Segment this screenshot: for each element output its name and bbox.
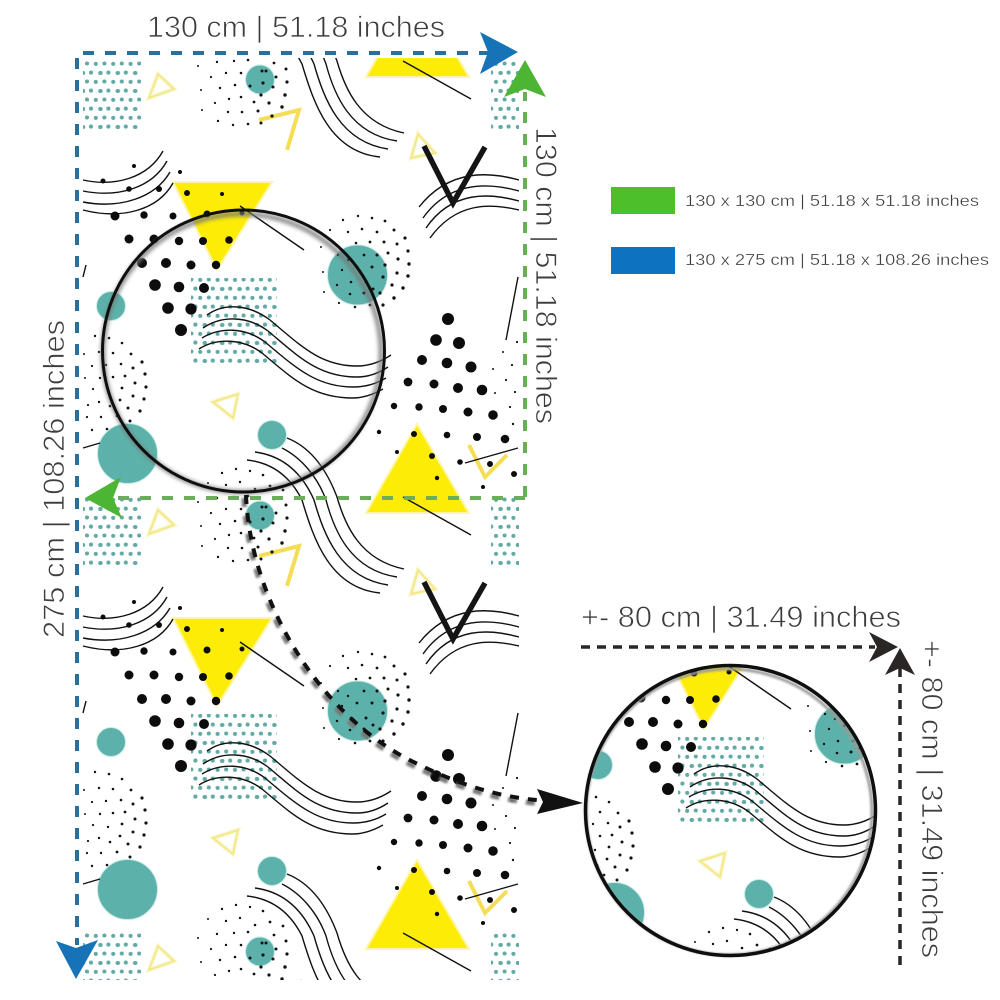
arrow: blue down <box>56 940 98 979</box>
label: right height: 130 cm | 51.18 inches <box>529 127 562 424</box>
arrow: connector head <box>537 789 583 814</box>
legend: green swatch <box>611 187 675 214</box>
curved dashed connector <box>244 495 537 803</box>
arrow: sample height <box>885 648 915 675</box>
arrow: sample width <box>869 632 898 662</box>
arrow: green left <box>85 477 122 518</box>
legend: green label: 130 x 130 cm | 51.18 x 51.18 inches <box>685 193 979 210</box>
panel: wallpaper pattern strip <box>80 58 519 980</box>
label: sample height: +- 80 cm | 31.49 inches <box>915 640 948 958</box>
label: top width: 130 cm | 51.18 inches <box>147 11 445 44</box>
arrow: blue right <box>480 32 518 74</box>
label: left height: 275 cm | 108.26 inches <box>38 320 71 638</box>
dashed outline: right side (green) <box>523 92 527 497</box>
sample height dashed line <box>898 668 902 965</box>
dashed outline: width (blue) <box>83 51 490 55</box>
sample width dashed line <box>581 645 875 649</box>
magnified pattern <box>585 665 876 956</box>
dashed outline: height (blue) <box>75 58 79 945</box>
legend: blue label: 130 x 275 cm | 51.18 x 108.26 inches <box>685 252 989 269</box>
panel: magnified sample circle <box>585 665 876 956</box>
lens circle over wallpaper <box>102 210 384 492</box>
arrow: green up <box>504 60 546 97</box>
dashed outline: horizontal bottom (green) <box>118 496 525 500</box>
legend: blue swatch <box>611 247 675 274</box>
label: sample width: +- 80 cm | 31.49 inches <box>581 601 901 634</box>
